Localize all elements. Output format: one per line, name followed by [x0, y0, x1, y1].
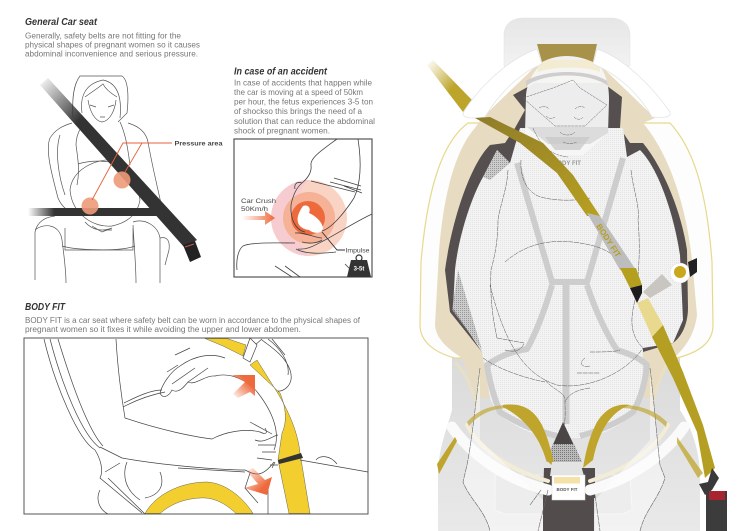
label: car crush: 50Km/h — [241, 206, 268, 213]
belt clip — [630, 285, 642, 303]
illustration frame — [234, 139, 372, 277]
body fit headrest label: BODY FIT — [553, 161, 581, 167]
text block: general car seat description: physical shapes of pregnant women so it causes — [25, 40, 200, 50]
text block: accident description: In case of accidents that happen while — [234, 78, 373, 88]
icon: fetus — [298, 206, 323, 233]
yellow shoulder belt — [205, 338, 310, 514]
arrow: car crush direction — [242, 211, 275, 225]
belt grey tag with body fit text — [587, 213, 642, 288]
text block: accident description: of shockso this brings the need of a — [234, 107, 363, 116]
arrow: lower pressure avoided — [244, 468, 272, 495]
shell beige frame — [435, 62, 697, 398]
belt tongue — [643, 274, 672, 298]
face outline — [523, 80, 607, 157]
seat inner cushion — [495, 475, 632, 514]
text block: general car seat description: Generally, safety belts are not fitting for the — [25, 32, 182, 40]
translucent belt section — [637, 298, 663, 337]
text block: body fit description — [25, 316, 361, 334]
text block: general car seat description: abdominal inconvenience and serious pressure. — [25, 50, 198, 58]
panel: body fit car seat render — [420, 18, 727, 531]
label: impulse: Impulse — [346, 248, 370, 254]
darker mesh side patches — [452, 150, 510, 350]
text block: accident description — [234, 78, 375, 136]
illustration: pregnant woman in car seat — [35, 76, 169, 283]
lap tube frame — [452, 425, 684, 490]
callout: pressure area — [92, 140, 223, 200]
center buckle — [550, 462, 585, 500]
callout: pressure area: Pressure area — [174, 140, 223, 148]
gold lower belt — [652, 325, 715, 478]
icon: weight — [347, 255, 371, 277]
lower side rails — [455, 362, 668, 408]
heading: general car seat: General Car seat — [25, 17, 98, 28]
text block: body fit description: BODY FIT is a car seat where safety belt can be worn in accordance to the physical shapes of — [25, 316, 361, 325]
label: impulse — [322, 232, 370, 254]
floor buckle — [699, 468, 727, 531]
label: car crush — [241, 198, 276, 213]
label: car crush: Car Crush — [241, 198, 276, 205]
thigh outline — [463, 368, 665, 531]
headband and shading — [526, 60, 608, 150]
mesh seat back — [453, 128, 683, 438]
torso outline — [483, 160, 643, 430]
grey harness straps — [487, 158, 647, 436]
heading: in case of an accident: In case of an accident — [234, 66, 328, 78]
wing: top white headrest collar — [463, 49, 670, 118]
shoulder anchor — [670, 258, 697, 283]
text block: accident description: the car is moving at a speed of 50km — [234, 88, 363, 97]
crotch strap base — [543, 422, 595, 531]
gold shoulder belt tail — [427, 60, 472, 112]
illustration: belly, hands and seat — [44, 338, 368, 514]
panel: in case of an accident — [234, 66, 375, 277]
impact circles — [271, 180, 347, 256]
translucent thighs — [463, 368, 665, 531]
shell dark padding — [445, 83, 688, 352]
body outline — [237, 139, 372, 277]
illustration frame — [24, 338, 368, 514]
belt buckle — [183, 241, 201, 262]
shoulder belt — [40, 78, 197, 247]
pressure points — [82, 172, 130, 214]
panel: body fit — [24, 302, 368, 514]
belt grey tag with body fit text: BODY FIT — [594, 222, 623, 259]
center buckle: BODY FIT — [557, 487, 578, 492]
text block: accident description: shock of pregnant women. — [234, 126, 330, 136]
belt clasp — [278, 453, 303, 464]
gold top tab — [537, 44, 597, 62]
heading: body fit: BODY FIT — [25, 302, 66, 313]
seat base cushion — [438, 352, 700, 531]
gold shoulder belt — [475, 117, 600, 216]
text block: general car seat description — [25, 32, 200, 58]
lap belt — [28, 208, 160, 216]
woman's head, translucent — [525, 63, 609, 155]
text block: accident description: solution that can reduce the abdominal — [234, 117, 375, 126]
shell outer — [420, 123, 713, 358]
arrow: upper pressure avoided — [232, 375, 255, 398]
headrest — [504, 18, 630, 66]
text block: body fit description: pregnant women so it fixes it while avoiding the upper and lower abdomen. — [25, 325, 301, 334]
gold lap belts — [437, 404, 703, 478]
yellow lap belt — [145, 482, 253, 514]
text block: accident description: per hour, the fetus experiences 3-5 ton — [234, 98, 373, 106]
panel: general car seat — [25, 17, 223, 283]
icon: weight: 3-5t — [354, 266, 364, 272]
